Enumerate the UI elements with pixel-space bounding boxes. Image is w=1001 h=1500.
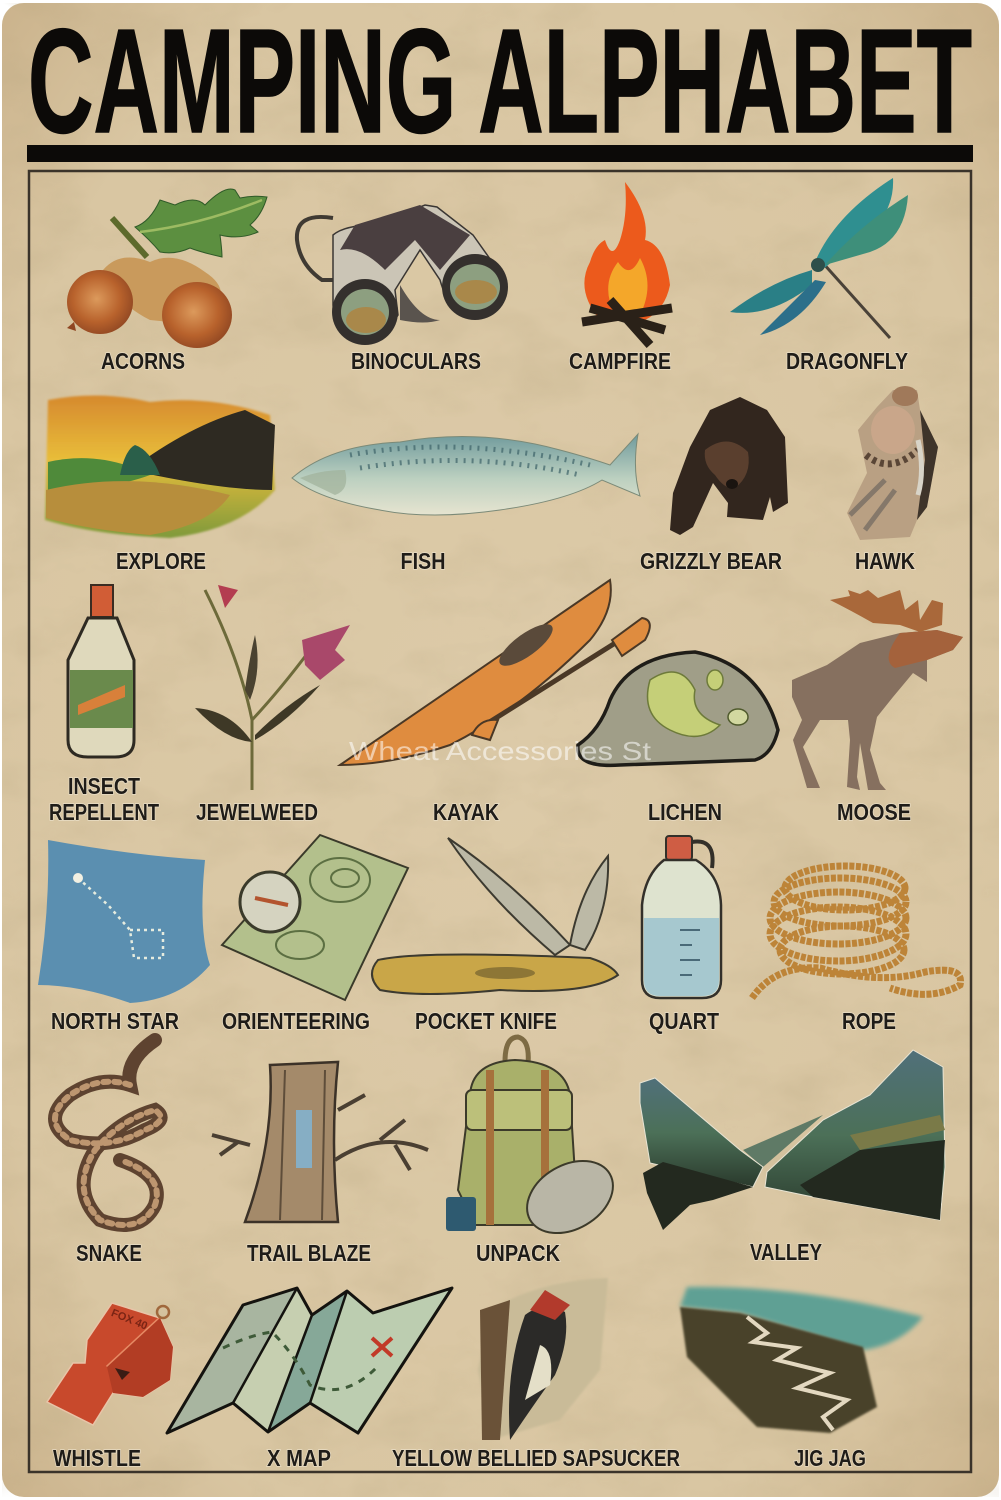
- item: explore: [45, 395, 275, 574]
- label: orienteering: ORIENTEERING: [222, 1008, 370, 1034]
- label: dragonfly: DRAGONFLY: [786, 348, 908, 374]
- icon: hawk: [847, 386, 938, 540]
- item: hawk: [847, 386, 938, 574]
- label: insect repellent: [49, 773, 159, 825]
- label: fish: FISH: [400, 548, 446, 574]
- label: north star: NORTH STAR: [51, 1008, 179, 1034]
- icon: fish: [292, 434, 640, 515]
- icon: moose: [792, 590, 963, 790]
- item: snake: [55, 1040, 161, 1266]
- icon: treasure map: [167, 1288, 452, 1433]
- icon: sapsucker on trunk: [478, 1278, 608, 1440]
- icon: repellent bottle: [68, 585, 134, 757]
- label: trail blaze: TRAIL BLAZE: [247, 1240, 371, 1266]
- label: grizzly bear: GRIZZLY BEAR: [640, 548, 782, 574]
- item: grizzly bear: [640, 397, 788, 574]
- label: unpack: UNPACK: [476, 1240, 560, 1266]
- item: yellow bellied sapsucker: [392, 1278, 680, 1471]
- item: binoculars: [297, 205, 508, 374]
- icon: winding road: [680, 1287, 923, 1433]
- label: x map: X MAP: [267, 1445, 331, 1471]
- label: insect repellent: INSECT: [68, 773, 140, 799]
- label: acorns: ACORNS: [101, 348, 185, 374]
- label: yellow bellied sapsucker: YELLOW BELLIED SAPSUCKER: [392, 1445, 680, 1471]
- item: kayak: [340, 580, 650, 825]
- item: fish: [292, 434, 640, 574]
- label: snake: SNAKE: [76, 1240, 142, 1266]
- icon: grizzly bear: [670, 397, 788, 535]
- icon: pocket knife: [372, 838, 618, 994]
- item: jig jag: [680, 1287, 923, 1471]
- label: valley: VALLEY: [750, 1239, 822, 1265]
- icon: dragonfly: [730, 178, 908, 338]
- icon: binoculars: [297, 205, 508, 345]
- icon: acorns: [67, 189, 267, 348]
- item: campfire: [569, 182, 672, 374]
- item: lichen: [578, 652, 778, 825]
- label: rope: ROPE: [842, 1008, 896, 1034]
- item: rope: [752, 866, 961, 1034]
- label: whistle: WHISTLE: [53, 1445, 141, 1471]
- icon: campfire: [582, 182, 672, 345]
- label: jig jag: JIG JAG: [794, 1445, 866, 1471]
- title rule: [27, 145, 973, 162]
- item: north star: [38, 840, 210, 1034]
- item: moose: [792, 590, 963, 825]
- item: x map: [167, 1288, 452, 1471]
- label: explore: EXPLORE: [116, 548, 206, 574]
- label: kayak: KAYAK: [433, 799, 499, 825]
- label: quart: QUART: [649, 1008, 719, 1034]
- icon: lichen rock: [578, 652, 778, 765]
- icon: explore landscape: [45, 395, 275, 538]
- icon: jewelweed: [195, 585, 350, 790]
- label: insect repellent: REPELLENT: [49, 799, 159, 825]
- item: trail blaze: [212, 1062, 428, 1266]
- label: binoculars: BINOCULARS: [351, 348, 481, 374]
- item: acorns: [67, 189, 267, 374]
- watermark: Wheat Accessories St: [349, 736, 652, 766]
- label: moose: MOOSE: [837, 799, 911, 825]
- icon: map and compass: [222, 835, 408, 1000]
- item: insect repellent: [49, 585, 159, 825]
- icon: tree with blaze: [212, 1062, 428, 1222]
- icon: backpack, mug, sleeping bag: [446, 1037, 626, 1248]
- icon: quart bottle: [642, 836, 721, 998]
- item: pocket knife: [372, 838, 618, 1034]
- item: jewelweed: [195, 585, 350, 825]
- item: valley: [640, 1050, 945, 1265]
- label: campfire: CAMPFIRE: [569, 348, 671, 374]
- icon: snake: [55, 1040, 161, 1225]
- item: orienteering: [222, 835, 408, 1034]
- label: lichen: LICHEN: [648, 799, 722, 825]
- label: jewelweed: JEWELWEED: [196, 799, 318, 825]
- item: dragonfly: [730, 178, 908, 374]
- icon: mountain valley: [640, 1050, 945, 1230]
- icon: kayak with paddle: [340, 580, 650, 765]
- item: whistle: [47, 1303, 173, 1471]
- item: unpack: [446, 1037, 626, 1266]
- icon: coiled rope: [752, 866, 961, 998]
- icon: star map: [38, 840, 210, 1003]
- label: hawk: HAWK: [855, 548, 915, 574]
- item: quart: [642, 836, 721, 1034]
- icon: whistle: [47, 1303, 173, 1425]
- label: pocket knife: POCKET KNIFE: [415, 1008, 557, 1034]
- icon: whistle: FOX 40: [109, 1307, 149, 1333]
